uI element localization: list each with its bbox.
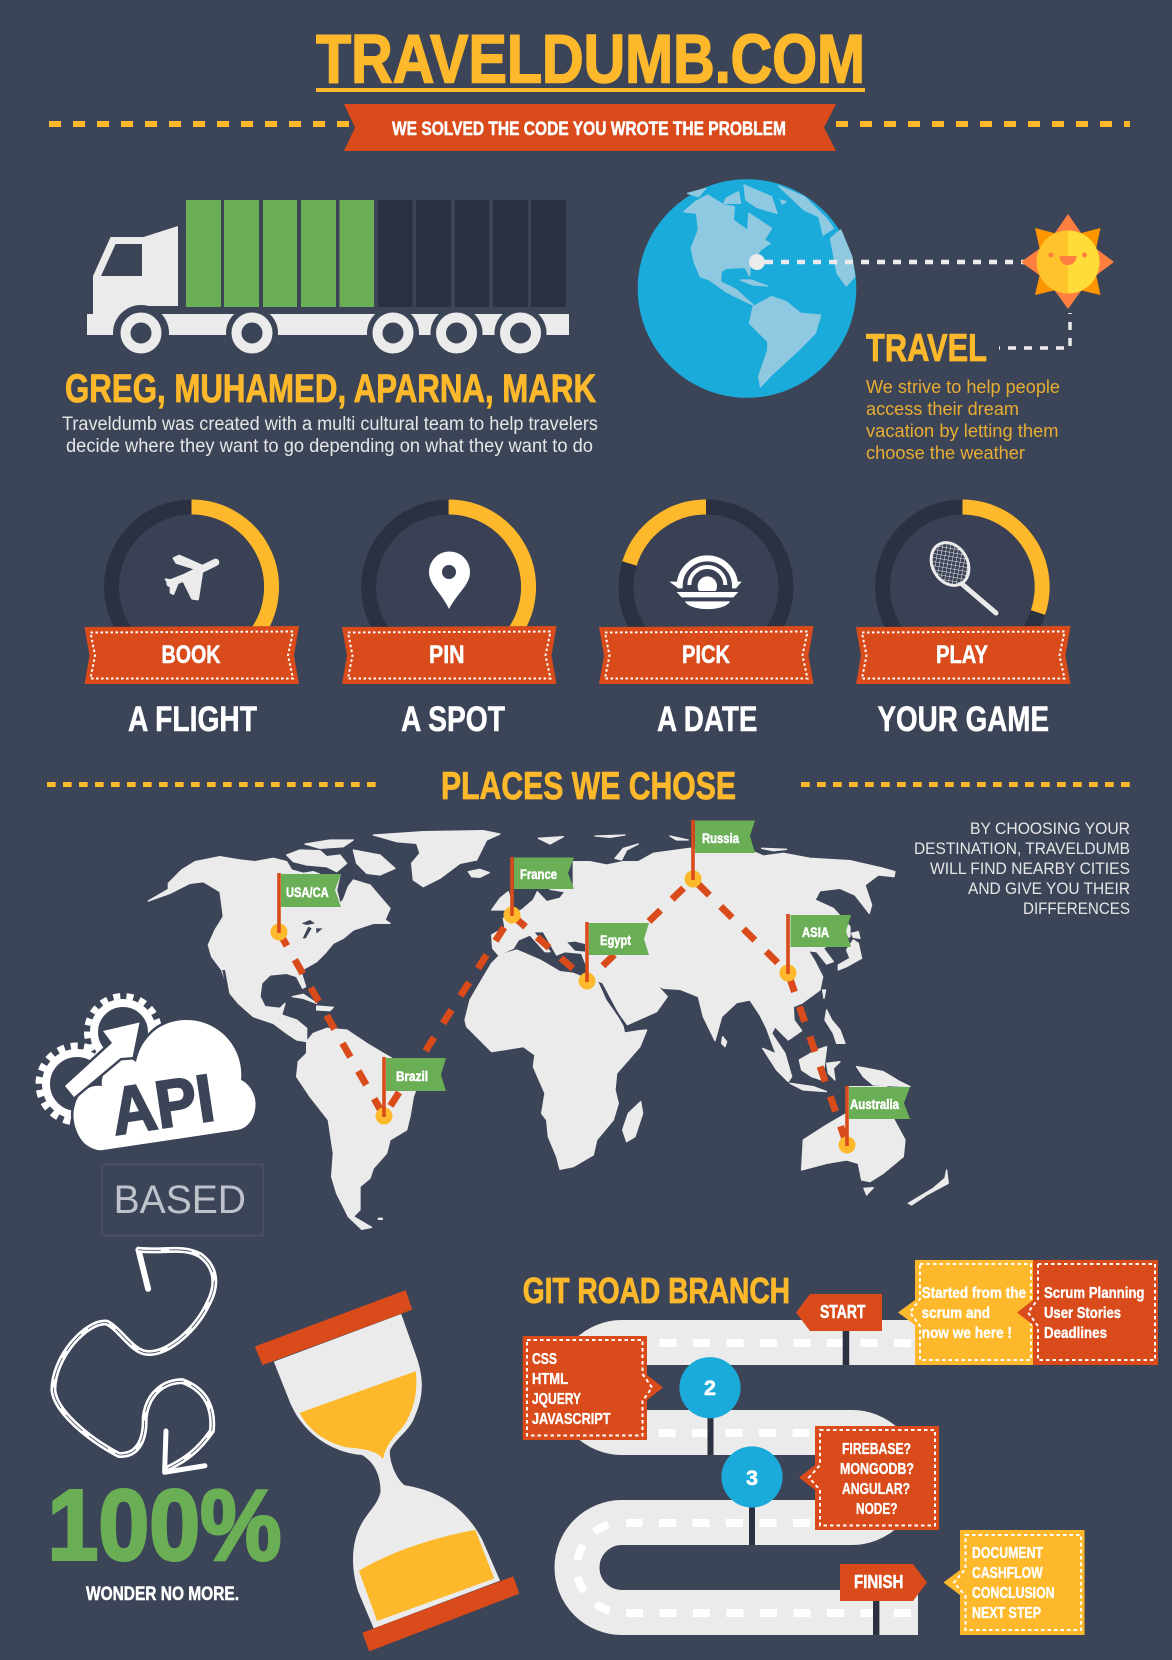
heading: git road branch: GIT ROAD BRANCH xyxy=(523,1270,790,1311)
sign posts xyxy=(708,1330,879,1635)
flag: france xyxy=(504,857,574,924)
road markings xyxy=(577,1343,911,1613)
caption: WONDER NO MORE. xyxy=(86,1584,239,1605)
ribbon: pin xyxy=(342,626,556,684)
globe xyxy=(638,179,856,398)
map note: BY CHOOSING YOUR xyxy=(970,820,1130,838)
dashed rule right xyxy=(836,121,1130,127)
icon: cloud xyxy=(73,1020,256,1150)
team description: decide where they want to go depending on what they want to do xyxy=(66,436,593,457)
route dashes xyxy=(279,879,847,1145)
world map xyxy=(148,820,948,1229)
flag: egypt xyxy=(578,922,649,990)
big number: 100% xyxy=(48,1470,282,1582)
api label: API xyxy=(106,1060,219,1150)
flag: australia: Australia xyxy=(850,1097,899,1112)
map note: DESTINATION, TRAVELDUMB xyxy=(914,840,1130,858)
dashed rule left xyxy=(47,782,376,787)
callout: started from the scrum: now we here ! xyxy=(922,1325,1012,1342)
flag: usa/ca: USA/CA xyxy=(286,885,329,900)
flag: usa/ca xyxy=(270,873,341,940)
callout: document: CONCLUSION xyxy=(972,1585,1054,1602)
map: americas and greenland xyxy=(148,831,500,1229)
icon: map pin xyxy=(429,551,470,609)
callout: started from the scrum xyxy=(898,1260,1034,1365)
callout: css html: HTML xyxy=(532,1371,568,1388)
based box: BASED xyxy=(114,1178,246,1222)
callout: databases xyxy=(799,1426,939,1530)
callout: scrum planning: Deadlines xyxy=(1044,1325,1107,1342)
map note: WILL FIND NEARBY CITIES xyxy=(930,860,1130,878)
callout: css html: CSS xyxy=(532,1351,557,1368)
caption: a flight: A FLIGHT xyxy=(128,700,257,739)
truck cargo bars empty xyxy=(378,200,566,307)
map note xyxy=(914,820,1130,918)
road xyxy=(577,1342,918,1612)
map: europe asia africa oceania xyxy=(465,835,948,1205)
finish sign xyxy=(840,1564,927,1601)
callout: databases: MONGODB? xyxy=(840,1461,914,1478)
flag: france: France xyxy=(520,867,557,882)
flag: asia: ASIA xyxy=(802,925,829,940)
truck cargo bars filled xyxy=(186,200,374,307)
icon: plane xyxy=(166,556,216,599)
callout: document xyxy=(944,1530,1084,1635)
step: book a flight xyxy=(84,507,299,739)
team description xyxy=(62,414,598,457)
callout: document: NEXT STEP xyxy=(972,1605,1041,1622)
callout: databases: NODE? xyxy=(856,1501,898,1518)
travel text xyxy=(866,376,1060,463)
callout: css html: JQUERY xyxy=(532,1391,582,1408)
marker: 3: 3 xyxy=(746,1467,758,1490)
marker: 2: 2 xyxy=(704,1377,716,1400)
panel: wonder no more xyxy=(48,1250,282,1605)
travel text: choose the weather xyxy=(866,442,1025,463)
map note: AND GIVE YOU THEIR xyxy=(968,880,1130,898)
callout: document: CASHFLOW xyxy=(972,1565,1043,1582)
team names: GREG, MUHAMED, APARNA, MARK xyxy=(65,367,596,411)
step: play your game xyxy=(856,507,1070,739)
callout: databases: ANGULAR? xyxy=(842,1481,910,1498)
panel: git road branch xyxy=(523,1260,1158,1635)
truck body xyxy=(87,226,569,361)
marker: 2 xyxy=(679,1357,741,1418)
callout: started from the scrum: scrum and xyxy=(922,1305,990,1322)
panel: header xyxy=(49,20,1130,151)
flag: asia xyxy=(780,914,851,982)
callout: scrum planning xyxy=(1017,1260,1158,1365)
panel: travel globe xyxy=(638,179,1114,463)
flag: russia: Russia xyxy=(702,831,739,846)
callout: css html xyxy=(523,1336,663,1440)
travel text: access their dream xyxy=(866,398,1019,419)
flag: russia xyxy=(684,820,755,888)
heading: travel: TRAVEL xyxy=(866,327,987,370)
panel: api based xyxy=(39,996,263,1236)
team description: Traveldumb was created with a multi cultural team to help travelers xyxy=(62,414,598,435)
flag: australia xyxy=(838,1086,910,1154)
truck wheels xyxy=(126,318,536,348)
icon: tennis racket xyxy=(924,536,996,613)
travel text: vacation by letting them xyxy=(866,420,1058,441)
icon: sun xyxy=(1021,214,1114,309)
panel: team truck xyxy=(62,200,598,457)
ribbon: play xyxy=(856,626,1070,684)
ribbon: pick xyxy=(599,626,814,684)
based box xyxy=(102,1164,263,1236)
ribbon: pin: PIN xyxy=(429,641,464,669)
icon: hourglass xyxy=(255,1290,519,1651)
marker: 3 xyxy=(721,1446,783,1508)
hand drawn arrow xyxy=(53,1250,214,1472)
ribbon: pick: PICK xyxy=(682,641,730,669)
caption: your game: YOUR GAME xyxy=(878,700,1049,739)
location dot xyxy=(749,254,765,270)
caption: a date: A DATE xyxy=(657,700,758,739)
map note: DIFFERENCES xyxy=(1023,900,1130,918)
finish sign: FINISH xyxy=(854,1572,903,1592)
connector dashes to text xyxy=(999,307,1070,348)
dashed rule left xyxy=(49,121,349,127)
title underline xyxy=(316,88,865,92)
flag: egypt: Egypt xyxy=(600,933,631,948)
heading: places we chose: PLACES WE CHOSE xyxy=(441,765,736,808)
connector dashes to sun xyxy=(765,260,1025,264)
ribbon: play: PLAY xyxy=(936,641,988,669)
callout: document: DOCUMENT xyxy=(972,1545,1043,1562)
flag: brazil xyxy=(376,1057,446,1124)
callout: css html: JAVASCRIPT xyxy=(532,1411,611,1428)
start sign xyxy=(796,1294,882,1331)
subtitle ribbon xyxy=(344,104,836,151)
dashed rule right xyxy=(801,782,1130,787)
icon: arrow xyxy=(65,1022,140,1097)
travel text: We strive to help people xyxy=(866,376,1060,397)
ribbon: book xyxy=(84,626,299,684)
subtitle: WE SOLVED THE CODE YOU WROTE THE PROBLEM xyxy=(392,118,786,140)
callout: databases: FIREBASE? xyxy=(842,1441,911,1458)
callout: started from the scrum: Started from the xyxy=(922,1285,1026,1302)
callout: scrum planning: Scrum Planning xyxy=(1044,1285,1144,1302)
title: TRAVELDUMB.COM xyxy=(316,20,865,98)
flag: brazil: Brazil xyxy=(396,1069,428,1084)
icon: sunset xyxy=(669,558,742,609)
icon: gears xyxy=(39,996,159,1122)
start sign: START xyxy=(820,1302,866,1322)
ribbon: book: BOOK xyxy=(162,641,220,669)
step: pick a date xyxy=(599,507,814,739)
callout: scrum planning: User Stories xyxy=(1044,1305,1121,1322)
step: pin a spot xyxy=(342,507,556,739)
caption: a spot: A SPOT xyxy=(401,700,505,739)
panel: four steps xyxy=(84,507,1070,739)
